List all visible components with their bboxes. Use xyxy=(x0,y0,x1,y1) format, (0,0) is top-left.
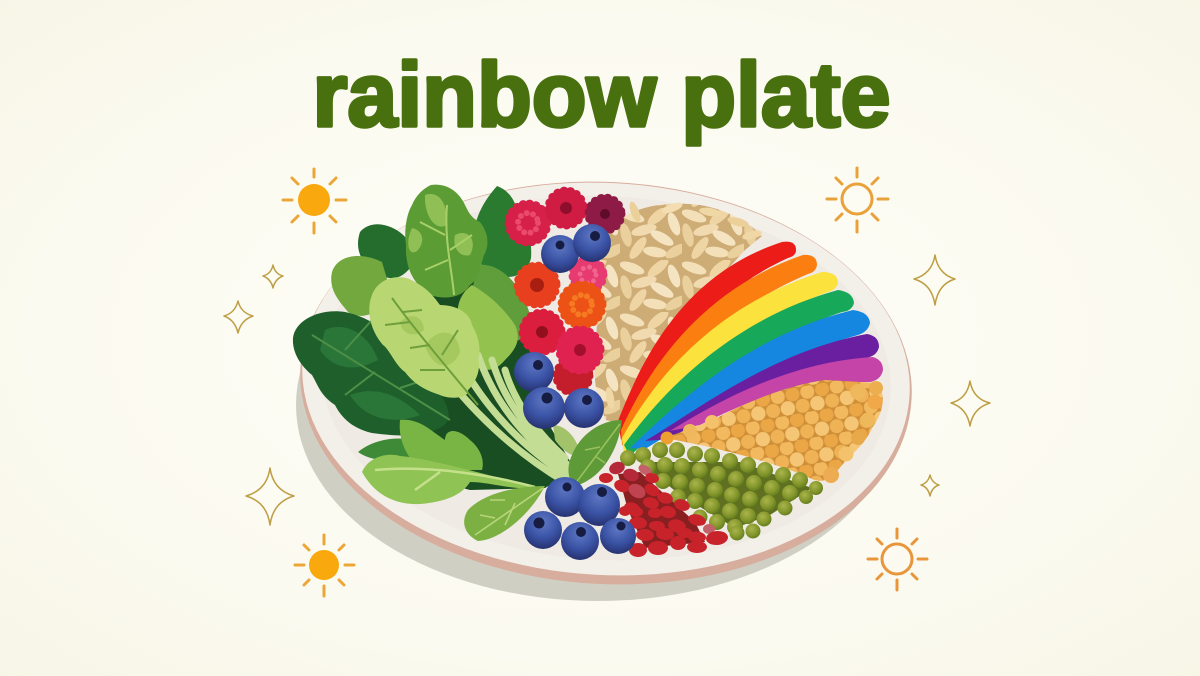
sparkle xyxy=(246,468,294,525)
rainbow arcs xyxy=(618,242,883,456)
spinach midrib xyxy=(312,320,450,420)
upper leaf vein xyxy=(420,205,472,295)
plate surface xyxy=(292,167,920,591)
large dark spinach leaf xyxy=(293,311,449,435)
blueberry xyxy=(523,387,565,429)
dark leaf backing xyxy=(395,270,575,490)
red beans xyxy=(599,460,729,557)
icon: outlined sun bottom right xyxy=(868,529,927,590)
blueberry xyxy=(573,224,611,262)
raspberry xyxy=(560,330,600,370)
dark leaf top left xyxy=(358,224,410,278)
lettuce midrib xyxy=(385,298,478,405)
blueberry xyxy=(545,477,585,517)
sparkles xyxy=(224,255,990,525)
lentils xyxy=(660,380,883,483)
center leaf vein xyxy=(575,424,620,484)
blueberry xyxy=(578,484,620,526)
raspberry xyxy=(557,360,589,392)
dark leaf right lobe xyxy=(472,265,530,341)
lettuce patches xyxy=(400,316,460,366)
upper bottom lettuce xyxy=(400,420,483,470)
yellow band xyxy=(622,272,838,453)
blueberry xyxy=(514,352,554,392)
sparkle xyxy=(951,381,990,426)
sparkle xyxy=(263,265,283,288)
green band xyxy=(624,290,854,456)
blueberry xyxy=(524,511,562,549)
raspberry xyxy=(549,191,583,225)
pale leaf behind center leaf xyxy=(553,425,580,456)
plate xyxy=(290,166,922,601)
blueberry xyxy=(561,522,599,560)
raspberry xyxy=(509,204,547,242)
icon: filled sun top left xyxy=(283,169,346,233)
bottom dark leaf fragment xyxy=(358,438,413,461)
upper light leaf xyxy=(405,185,487,298)
icon: filled sun bottom left xyxy=(295,535,354,596)
raspberries xyxy=(509,191,621,392)
large light lettuce leaf xyxy=(369,277,480,398)
spinach light patches xyxy=(320,327,420,420)
purple band xyxy=(645,334,879,441)
right center leaf xyxy=(568,420,622,486)
small leaf vein xyxy=(475,488,543,535)
title: rainbow plate xyxy=(312,45,890,146)
stems xyxy=(445,355,570,482)
blueberry xyxy=(541,235,579,273)
sparkle xyxy=(921,475,939,496)
blueberries xyxy=(514,224,636,560)
medium leaf left xyxy=(331,256,392,316)
red band xyxy=(618,242,796,440)
plate well xyxy=(312,181,900,575)
blueberry xyxy=(564,388,604,428)
plate rim xyxy=(290,166,922,600)
sparkle xyxy=(224,301,253,333)
pink band xyxy=(670,357,883,431)
raspberry xyxy=(523,313,561,351)
sparkle xyxy=(914,255,955,305)
raspberry xyxy=(573,260,603,290)
dark leaf top right xyxy=(474,186,531,277)
leafy greens xyxy=(293,185,622,541)
upper leaf light patches xyxy=(408,194,473,256)
plate shadow xyxy=(296,209,900,601)
raspberry xyxy=(562,285,602,325)
icon: outlined sun top right xyxy=(827,168,888,232)
bottom lettuce leaf xyxy=(362,455,537,504)
green mung beans xyxy=(620,442,823,540)
bottom lettuce vein xyxy=(375,469,535,490)
blue band xyxy=(630,310,870,449)
bottom small leaf xyxy=(464,486,545,541)
rice xyxy=(594,200,763,425)
small right leaf xyxy=(458,285,518,370)
orange band xyxy=(621,255,817,446)
raspberry xyxy=(518,266,556,304)
raspberry xyxy=(589,198,621,230)
blueberry xyxy=(600,518,636,554)
